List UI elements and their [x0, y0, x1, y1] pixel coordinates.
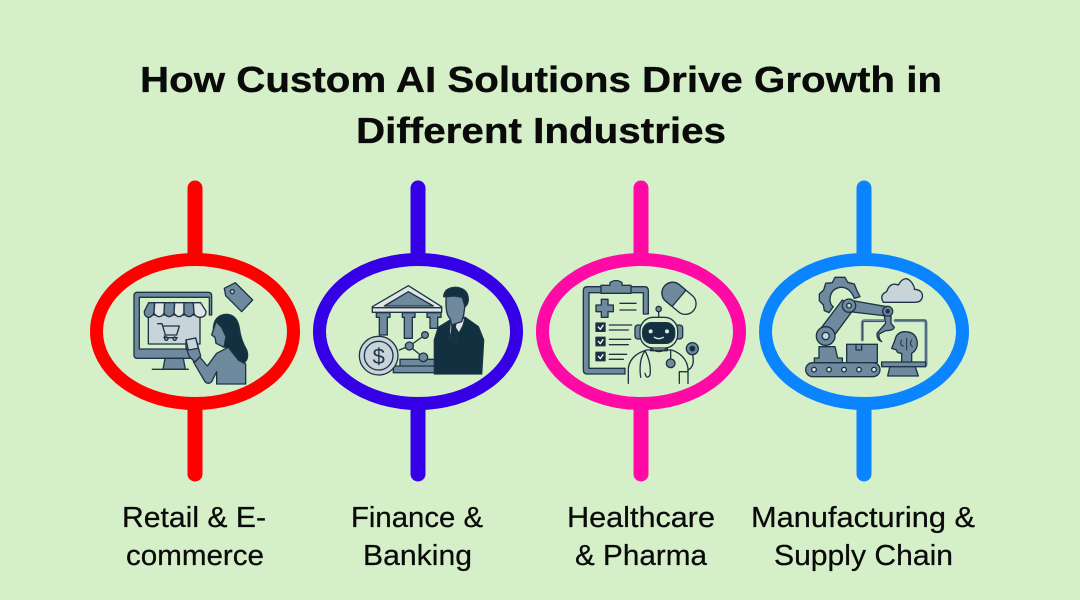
label: finance: Banking [363, 540, 472, 572]
panel: healthcare and pharma [542, 188, 740, 474]
label: healthcare [567, 502, 715, 572]
label: healthcare: & Pharma [575, 540, 708, 572]
connector line: healthcare [634, 188, 648, 474]
title: How Custom AI Solutions Drive Growth in [140, 59, 942, 100]
icon: clipboard, pill and robot doctor [583, 278, 700, 383]
label: manufacturing: Supply Chain [774, 540, 953, 572]
label: retail: commerce [126, 540, 264, 572]
panel: retail and e-commerce [96, 188, 294, 474]
label: retail [122, 502, 266, 572]
ring: finance [320, 260, 516, 404]
label: manufacturing [751, 502, 975, 572]
panel: finance and banking [320, 188, 516, 474]
label: manufacturing: Manufacturing & [751, 502, 975, 534]
title [140, 59, 942, 151]
icon: robot arm, cloud and AI monitor [806, 277, 926, 377]
ring: manufacturing [766, 260, 962, 404]
panel: manufacturing and supply chain [766, 188, 962, 474]
ring: healthcare [542, 260, 740, 404]
label: finance [351, 502, 483, 572]
connector line: retail [188, 188, 202, 474]
label: retail: Retail & E- [122, 502, 266, 534]
icon: online store and shopper [134, 283, 253, 384]
ring: retail [96, 260, 294, 404]
icon: bank, coin and banker [359, 286, 484, 375]
connector line: finance [410, 188, 426, 474]
label: healthcare: Healthcare [567, 502, 715, 534]
dollar sign on coin: $ [373, 344, 385, 369]
connector line: manufacturing [856, 188, 872, 474]
title: Different Industries [356, 110, 726, 151]
label: finance: Finance & [351, 502, 483, 534]
